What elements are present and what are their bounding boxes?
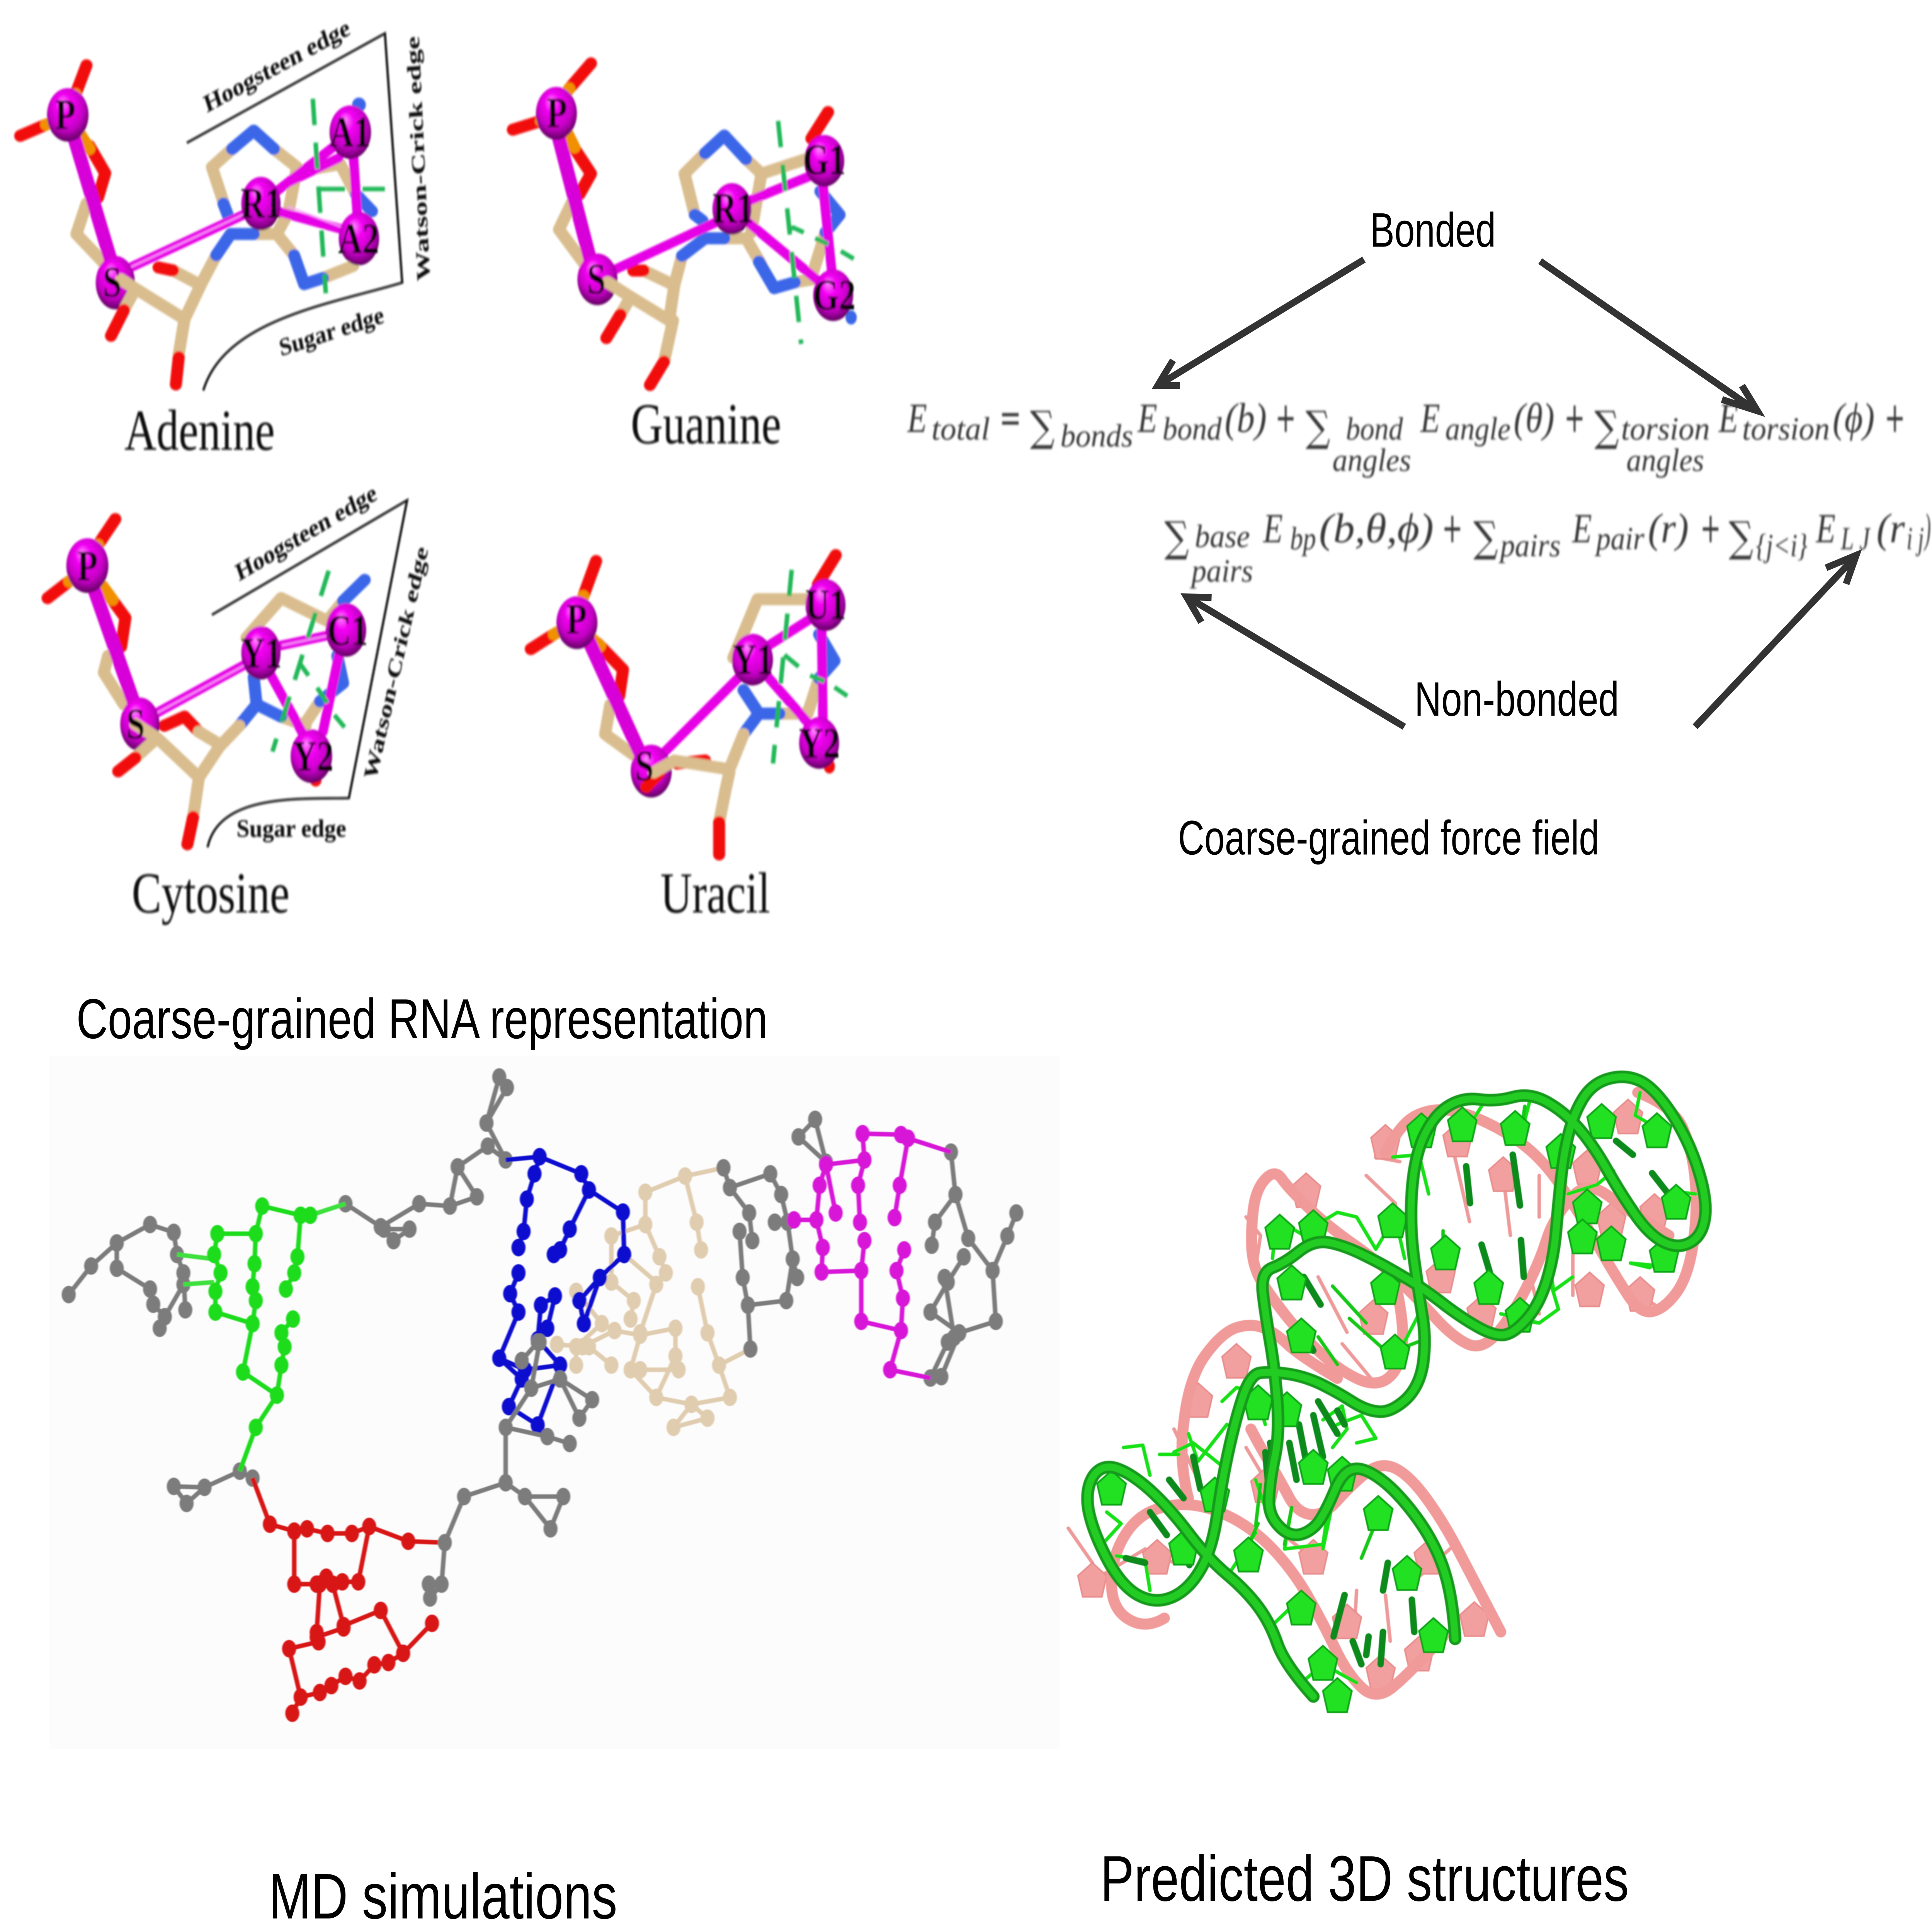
equation: first line of total energy: ∑: [1306, 402, 1330, 451]
predicted structure: green bases: [1097, 1092, 1696, 1712]
equation: second line of total energy: pairs: [1498, 528, 1561, 564]
atom labels: Cytosine: C1: [327, 606, 368, 655]
atom labels: Cytosine: [77, 542, 368, 780]
equation: second line of total energy: (b,θ,ϕ): [1319, 505, 1434, 551]
atom labels: Uracil: Y2: [799, 719, 840, 767]
equation: second line of total energy: L J: [1840, 521, 1871, 557]
equation: first line of total energy: E: [1420, 395, 1440, 441]
edge label: Sugar edge: Sugar edge: [236, 815, 346, 842]
caption: Coarse-grained force field: Coarse-grained force field: [1178, 811, 1599, 865]
equation: first line of total energy: ∑: [1594, 402, 1619, 451]
edge label: Hoogsteen edge: Hoogsteen edge: [232, 479, 380, 587]
equation: first line of total energy: +: [1884, 393, 1905, 442]
equation: first line of total energy: bonds: [1060, 418, 1133, 454]
atom labels: Adenine: A2: [338, 214, 379, 263]
panel: Adenine representation: [20, 14, 434, 463]
equation: first line of total energy: total: [932, 411, 990, 447]
equation: first line of total energy: bond: [1346, 411, 1403, 447]
edge label: Hoogsteen edge: Hoogsteen edge: [201, 14, 353, 118]
panel: Guanine representation: [513, 63, 857, 456]
molecule: Adenine sticks and beads: [20, 65, 385, 384]
label: Non-bonded: Non-bonded: [1415, 672, 1619, 726]
equation: first line of total energy: angle: [1445, 411, 1510, 447]
caption: Cytosine: Cytosine: [132, 861, 289, 925]
equation: second line of total energy: {j<i}: [1756, 528, 1808, 564]
panel: force field: [906, 203, 1931, 865]
atom labels: Uracil: S: [635, 742, 654, 790]
atom labels: Adenine: R1: [241, 179, 282, 227]
caption: Uracil: Uracil: [660, 861, 770, 925]
equation: second line of total energy: (r): [1648, 505, 1689, 551]
equation: first line of total energy: ∑: [1030, 402, 1055, 451]
atom labels: Uracil: Y1: [733, 635, 773, 684]
atom labels: Guanine: G2: [813, 271, 855, 319]
panel: Uracil representation: [531, 555, 847, 925]
equation: first line of total energy: angles: [1332, 442, 1411, 478]
atom labels: Cytosine: Y1: [241, 629, 282, 677]
equation: second line of total energy: E: [1815, 505, 1835, 551]
equation: first line of total energy: E: [1137, 395, 1157, 441]
equation: second line of total energy: base: [1195, 519, 1250, 554]
caption: Adenine: Adenine: [124, 398, 275, 463]
edge outline: Cytosine: [207, 500, 407, 847]
atom labels: Adenine: P: [55, 90, 75, 138]
equation: second line of total energy: ∑: [1729, 512, 1753, 561]
equation: second line of total energy: (r: [1877, 505, 1905, 551]
equation: second line of total energy: [1164, 503, 1931, 589]
label: Bonded: Bonded: [1370, 203, 1496, 257]
equation: second line of total energy: ∑: [1473, 512, 1498, 561]
molecule: Cytosine sticks and beads: [48, 519, 366, 844]
atom labels: Uracil: P: [566, 595, 587, 643]
equation: second line of total energy: i j: [1906, 521, 1924, 557]
atom labels: Guanine: R1: [713, 184, 753, 232]
equation: second line of total energy: +: [1700, 503, 1721, 552]
atom labels: Cytosine: Y2: [293, 732, 333, 780]
snapshot background: [49, 1056, 1060, 1749]
panel: Cytosine representation: [48, 479, 432, 925]
atom labels: Uracil: U1: [805, 580, 846, 629]
caption: Predicted 3D structures: Predicted 3D structures: [1100, 1843, 1629, 1915]
heading: Coarse-grained RNA representation: Coarse-grained RNA representation: [77, 987, 768, 1050]
predicted structure: green backbone ribbon: [1087, 1077, 1706, 1697]
bead model: RNA chain by coloured segments: [69, 1077, 1016, 1713]
equation: first line of total energy: =: [999, 393, 1021, 442]
edge label: Sugar edge: Sugar edge: [277, 301, 386, 362]
equation: first line of total energy: (θ): [1514, 395, 1554, 441]
molecule: Guanine sticks and beads: [513, 63, 857, 385]
molecule: Uracil sticks and beads: [531, 555, 847, 854]
equation: first line of total energy: [906, 393, 1905, 478]
equation: first line of total energy: angles: [1626, 442, 1704, 478]
equation: first line of total energy: E: [906, 395, 927, 441]
equation: first line of total energy: (ϕ): [1833, 395, 1874, 441]
atom labels: Guanine: P: [547, 89, 567, 137]
equation: first line of total energy: +: [1564, 393, 1585, 442]
arrow: Bonded to bond term: [1158, 260, 1364, 385]
atom labels: Guanine: S: [587, 255, 605, 303]
atom labels: Adenine: S: [103, 258, 121, 306]
equation: second line of total energy: bp: [1290, 521, 1316, 557]
atom labels: Guanine: [547, 89, 855, 319]
equation: second line of total energy: E: [1262, 505, 1283, 551]
equation: first line of total energy: torsion: [1742, 411, 1830, 447]
atom labels: Cytosine: S: [126, 700, 145, 748]
equation: second line of total energy: pairs: [1189, 553, 1253, 589]
atom labels: Adenine: [55, 90, 379, 306]
equation: second line of total energy: +: [1442, 503, 1463, 552]
panel: predicted 3D structures: [1068, 1077, 1706, 1712]
caption: Guanine: Guanine: [631, 392, 781, 456]
panel: MD simulations snapshot: [49, 1056, 1060, 1749]
atom labels: Uracil: [566, 580, 846, 790]
equation: second line of total energy: E: [1571, 505, 1592, 551]
equation: first line of total energy: bond: [1163, 411, 1222, 447]
atom labels: Adenine: A1: [330, 108, 370, 156]
arrow: Bonded to torsion term: [1540, 261, 1757, 411]
reference structure: salmon ribbon and bases: [1068, 1092, 1696, 1694]
arrow: Non-bonded to base pairs term: [1187, 597, 1404, 727]
equation: first line of total energy: torsion: [1621, 411, 1710, 447]
equation: first line of total energy: +: [1275, 393, 1296, 442]
atom labels: Cytosine: P: [77, 542, 98, 590]
edge outline: Adenine: [187, 34, 402, 391]
atom labels: Guanine: G1: [803, 136, 845, 184]
edge label: Watson-Crick edge: Watson-Crick edge: [402, 36, 434, 282]
caption: MD simulations: MD simulations: [269, 1861, 617, 1932]
equation: first line of total energy: E: [1718, 395, 1738, 441]
equation: second line of total energy: ∑: [1164, 512, 1189, 561]
arrow: Non-bonded to Lennard-Jones term: [1695, 555, 1856, 727]
equation: second line of total energy: pair: [1594, 521, 1645, 557]
equation: first line of total energy: (b): [1225, 395, 1267, 441]
edge label: Watson-Crick edge: Watson-Crick edge: [360, 543, 432, 783]
